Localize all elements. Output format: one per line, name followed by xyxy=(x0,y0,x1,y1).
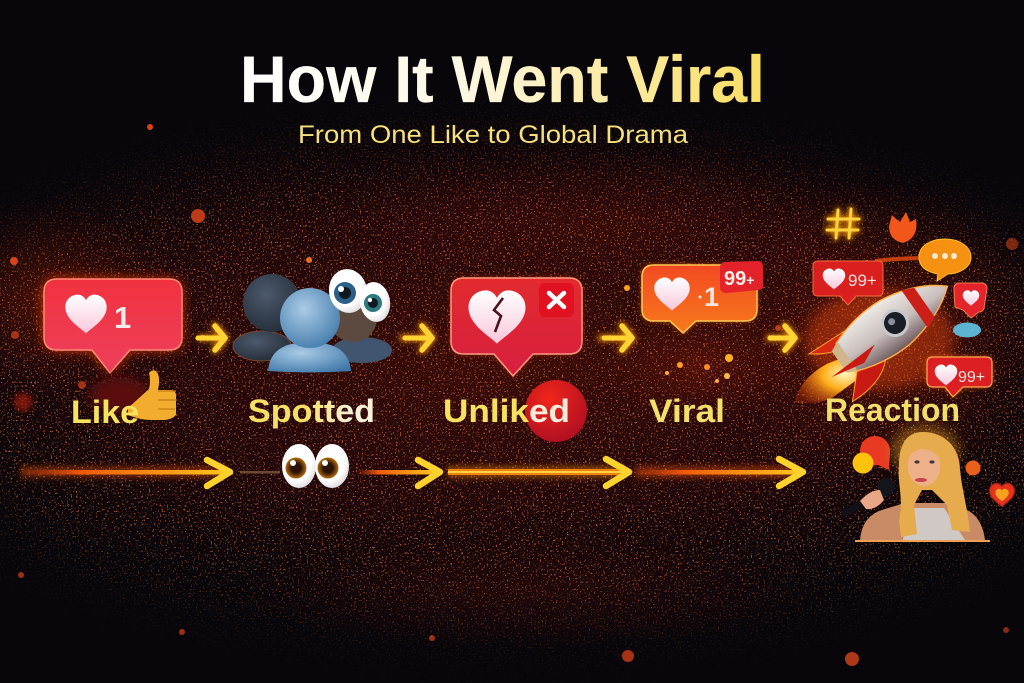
bubble: 99+ upper: 99+ xyxy=(848,271,877,290)
icon: red circle xyxy=(525,380,587,442)
hair and portrait xyxy=(860,425,985,540)
bubble: 99+ lower: 99+ xyxy=(958,369,985,386)
icon: group of people with eyes xyxy=(233,266,393,372)
long arrow timeline xyxy=(20,444,803,488)
step: Spotted xyxy=(233,266,393,429)
label: Like: Like xyxy=(71,394,139,430)
viral bubble: 1 xyxy=(704,282,719,312)
icon: flame xyxy=(889,212,916,243)
bubble: heart small xyxy=(954,283,987,318)
woman singer with microphone xyxy=(845,425,1015,542)
long arrow 1 xyxy=(20,460,230,486)
title: How It Went Viral xyxy=(240,42,765,116)
icon: rocket xyxy=(795,264,970,406)
icon: microphone xyxy=(845,478,895,513)
label: Unliked: Unliked xyxy=(443,393,570,429)
subtitle: From One Like to Global Drama xyxy=(298,121,688,149)
icon: glowing heart xyxy=(989,483,1015,507)
label: Viral: Viral xyxy=(649,393,725,429)
icon: hashtag xyxy=(827,209,859,238)
shadow behind thumb xyxy=(90,377,150,413)
bubble: 99+ lower xyxy=(927,357,992,397)
floating embers xyxy=(10,124,1018,666)
step: Reaction xyxy=(795,209,992,428)
step: Unliked xyxy=(443,278,587,442)
arrow: like to spotted xyxy=(198,326,225,350)
icon: thumbs up xyxy=(128,370,177,420)
bubble: 99+ upper xyxy=(813,261,883,305)
step: Like xyxy=(44,279,182,430)
arrow: spotted to unliked xyxy=(400,326,432,350)
long arrow 2 xyxy=(355,460,440,486)
baseline glow xyxy=(855,540,990,542)
rocket flame xyxy=(795,358,862,403)
viral bubble xyxy=(642,261,763,333)
like bubble: 1 xyxy=(114,300,131,335)
chat bubble with dots xyxy=(875,239,971,281)
rocket glow xyxy=(805,290,955,390)
like bubble xyxy=(44,279,182,373)
step: Viral xyxy=(642,261,763,429)
long arrow 4 xyxy=(635,459,803,486)
icon: x badge xyxy=(539,283,574,317)
label: Spotted: Spotted xyxy=(248,393,375,429)
arrow: unliked to viral xyxy=(598,326,632,350)
label: Reaction: Reaction xyxy=(825,392,960,428)
unliked bubble xyxy=(451,278,582,376)
speech blobs xyxy=(852,436,980,476)
dim line segment xyxy=(240,471,280,474)
icon: blue cloud xyxy=(953,322,981,338)
arrow: viral to reaction xyxy=(766,326,795,350)
icon: pair of eyes xyxy=(282,444,349,488)
long arrow 3 xyxy=(448,459,629,486)
badge: 99+: 99+ xyxy=(724,268,754,290)
icon: broken heart xyxy=(468,290,526,344)
